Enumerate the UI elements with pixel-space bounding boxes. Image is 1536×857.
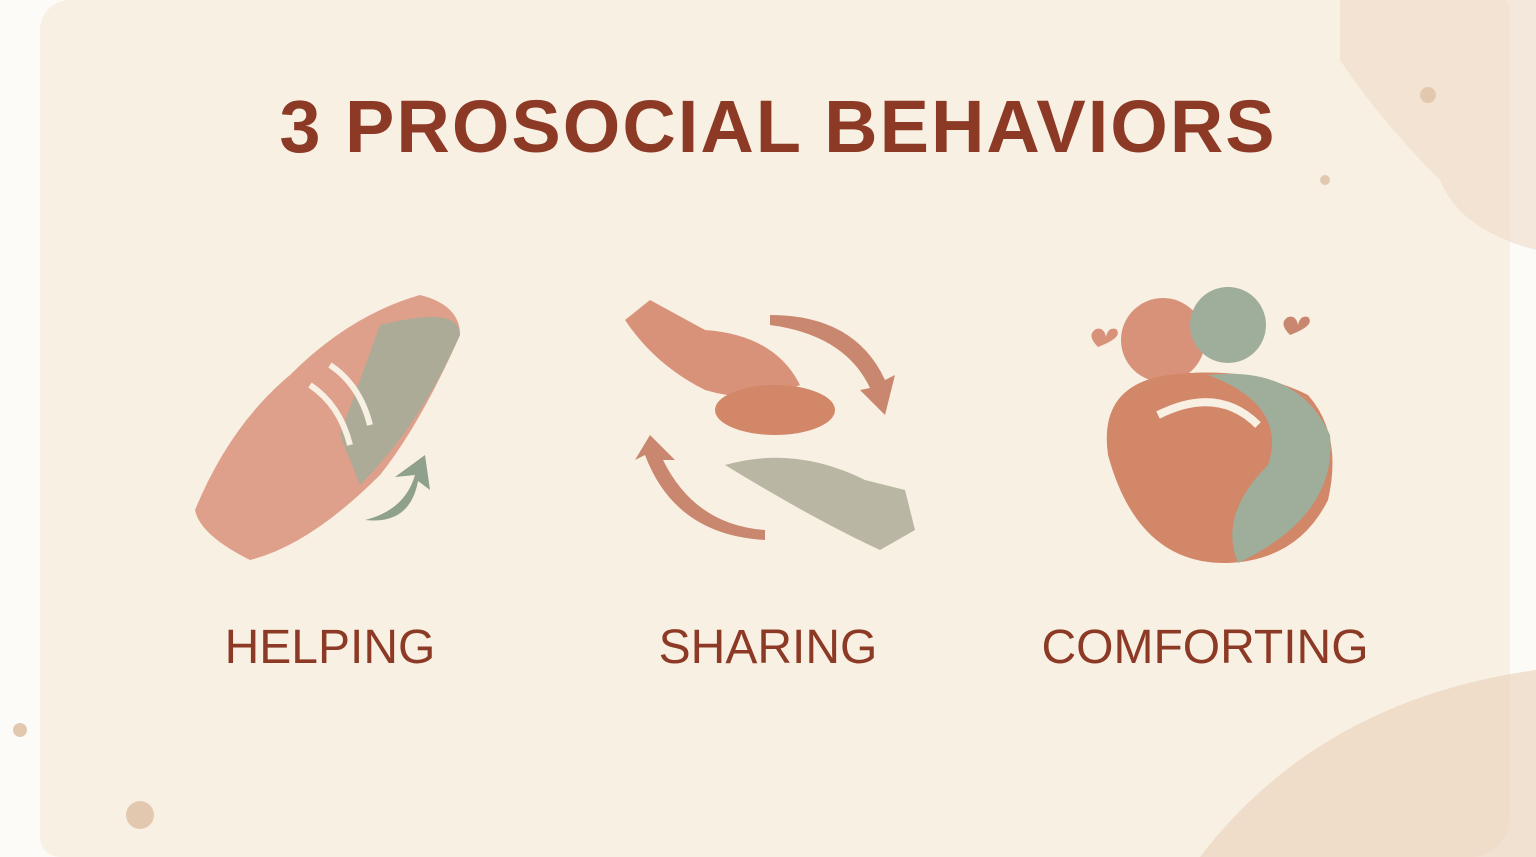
icon: sharing bread	[625, 300, 915, 550]
title: 3 PROSOCIAL BEHAVIORS	[279, 85, 1277, 168]
icon: helping hands	[195, 295, 460, 560]
label: helping: HELPING	[225, 621, 435, 674]
label: sharing: SHARING	[659, 621, 877, 674]
icon: comforting hug	[1092, 287, 1332, 563]
label: comforting: COMFORTING	[1041, 621, 1369, 674]
